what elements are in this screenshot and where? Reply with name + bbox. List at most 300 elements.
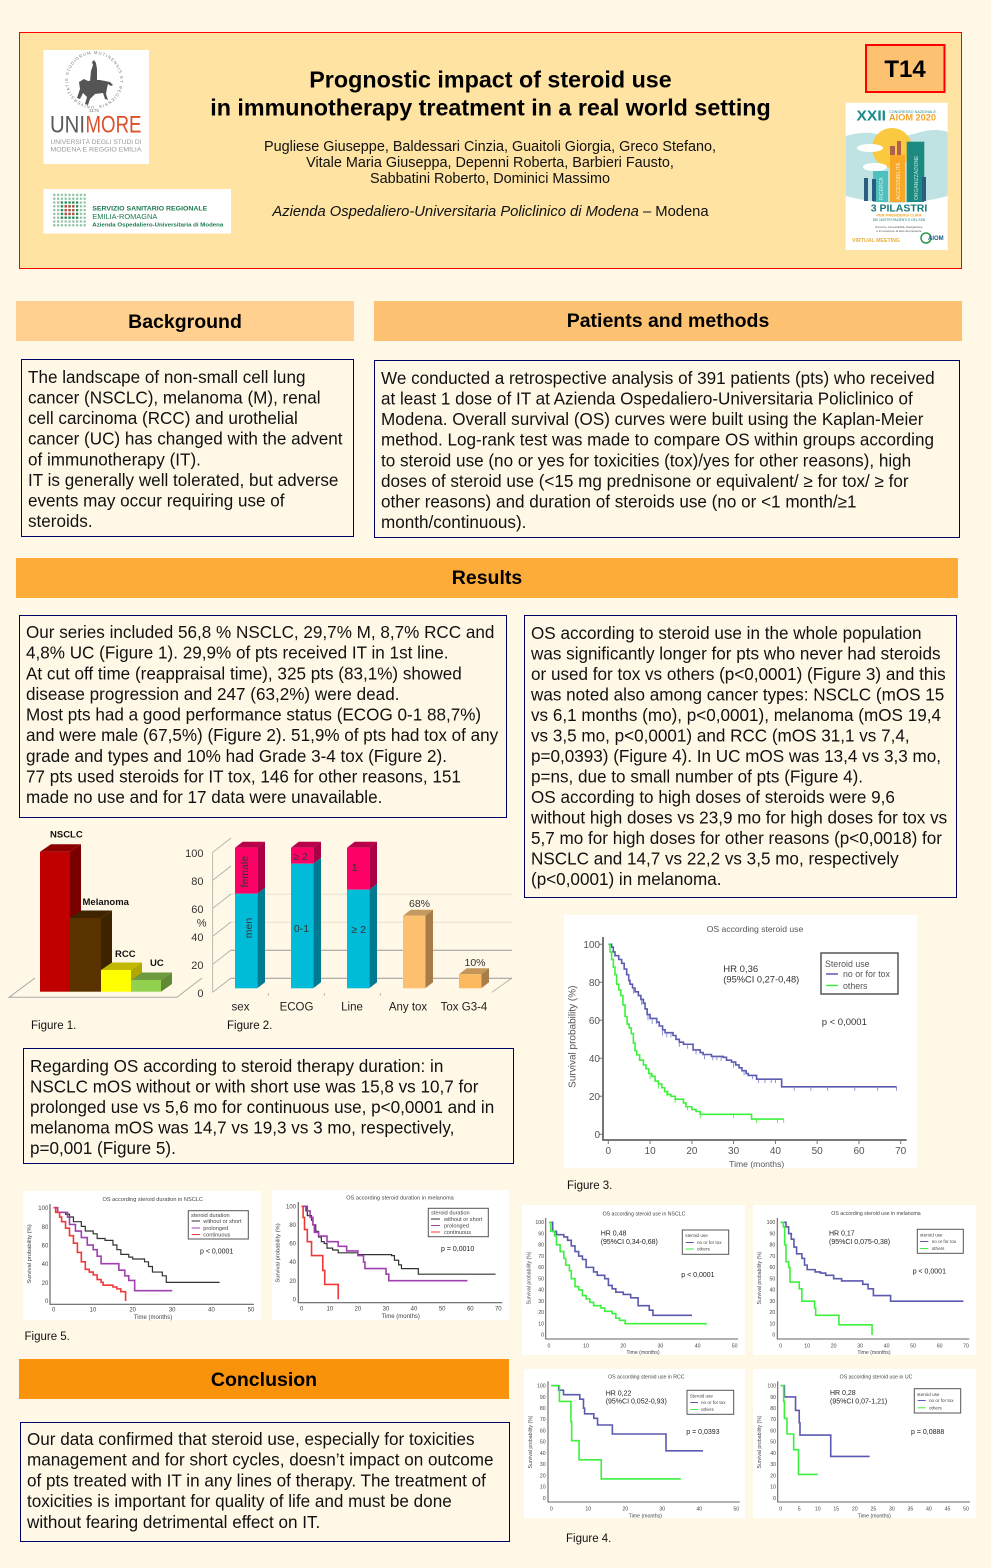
figure 4d: OS by steroid use in UC: 20: [852, 1506, 858, 1512]
figure 5a: OS by steroid duration in NSCLC: 20: [42, 1281, 49, 1287]
text block: OS according to steroid use: p=0,0393) (Figure 4). In UC mOS was 13,4 vs 3,3 mo,: [531, 747, 941, 766]
bar: RCC: [101, 962, 142, 992]
congress poster image: AIOM 2020: [889, 113, 936, 123]
figure 4b: OS by steroid use in melanoma: 0: [772, 1333, 775, 1339]
legend: Steroid use: [690, 1393, 713, 1398]
text block: OS according to steroid use: without high doses vs 23,9 mo for high doses for tox vs: [530, 808, 947, 828]
header panel: [19, 32, 962, 269]
figure 4a: OS by steroid use in NSCLC: 100: [535, 1220, 544, 1226]
figure 4b: OS by steroid use in melanoma: 90: [770, 1231, 775, 1237]
text block: steroid therapy duration: Regarding OS according to steroid therapy duration: in: [30, 1057, 443, 1076]
text block: OS according to steroid use: OS according to high doses of steroids were 9,6: [531, 788, 895, 807]
figure 4b: OS by steroid use in melanoma: p < 0,0001: [913, 1268, 946, 1276]
bar labels: NSCLC: [50, 830, 83, 840]
text block: patients and methods: month/continuous).: [381, 513, 526, 532]
figure 5b: OS by steroid duration in melanoma: Time (months): [381, 1314, 420, 1320]
figure 4a: OS by steroid use in NSCLC: 40: [695, 1343, 701, 1349]
axis labels: 0: [197, 988, 204, 1000]
authors: Sabbatini Roberto, Dominici Massimo: [370, 171, 610, 187]
text block: results series: 4,8% UC (Figure 1). 29,9% of pts received IT in 1st line.: [26, 644, 448, 663]
text block: OS according to steroid use: was noted also among cancer types: NSCLC (mOS 15: [530, 686, 944, 704]
figure 4c: OS by steroid use in RCC: [524, 1369, 745, 1519]
bar: ECOG: ≥ 2: [293, 851, 308, 863]
authors: Pugliese Giuseppe, Baldessari Cinzia, Guaitoli Giorgia, Greco Stefano,: [264, 139, 716, 155]
figure 5b: OS by steroid duration in melanoma: 60: [467, 1306, 474, 1312]
legend: without or short: [443, 1217, 483, 1223]
figure 3: Kaplan-Meier, OS according steroid use: 20: [686, 1146, 698, 1157]
figure 4a: OS by steroid use in NSCLC: 30: [658, 1343, 663, 1349]
figure 4b: OS by steroid use in melanoma: HR 0,17: [829, 1230, 855, 1238]
figure 4a: OS by steroid use in NSCLC: 70: [538, 1254, 544, 1260]
figure 4b: OS by steroid use in melanoma: 10: [770, 1321, 775, 1327]
bar labels: Melanoma: [82, 897, 130, 908]
bar: Melanoma: [70, 910, 112, 992]
figure 5b: OS by steroid duration in melanoma: 100: [286, 1204, 297, 1210]
logo: UNIMORE: UNI: [50, 112, 85, 139]
figure 4a: OS by steroid use in NSCLC: Time (months): [626, 1350, 660, 1356]
legend: steroid use: [917, 1392, 940, 1397]
figure 3: Kaplan-Meier, OS according steroid use: HR 0,36: [723, 964, 758, 975]
figure 3: Kaplan-Meier, OS according steroid use: 40: [770, 1146, 781, 1157]
logo: Servizio Sanitario Regionale: [44, 189, 231, 234]
abstract code badge: [866, 45, 944, 92]
affiliation: Azienda Ospedaliero-Universitaria Policlinico di Modena – Modena: [271, 204, 709, 220]
congress poster image: ACCESSIBILITÀ: [895, 162, 902, 200]
text block: conclusion: management and for short cycles, doesn’t impact on outcome: [27, 1451, 494, 1470]
figure 4c: OS by steroid use in RCC: 10: [540, 1484, 546, 1490]
figure 4a: OS by steroid use in NSCLC: 20: [538, 1310, 544, 1316]
congress poster image: DEI NOSTRI PAZIENTI E DEL SSN: [873, 218, 926, 222]
bar: ECOG: 0-1: [294, 923, 309, 935]
figure 4a: OS by steroid use in NSCLC: 10: [583, 1343, 589, 1349]
figure 5a: OS by steroid duration in NSCLC: 0: [45, 1299, 49, 1305]
figure 4b: OS by steroid use in melanoma: [753, 1205, 976, 1356]
text block: conclusion: of pts treated with IT in any lines of therapy. The treatment of: [27, 1472, 486, 1490]
text block: conclusion: [20, 1422, 510, 1542]
legend: steroid use: [685, 1233, 708, 1238]
bar labels: [50, 830, 164, 969]
figure 5a: OS by steroid duration in NSCLC: 30: [169, 1308, 176, 1314]
figure 4c: OS by steroid use in RCC: 100: [537, 1384, 546, 1390]
figure 4d: OS by steroid use in UC: (95%CI 0,07-1,21): [830, 1398, 887, 1406]
figure 4b: OS by steroid use in melanoma: 60: [770, 1265, 775, 1271]
text block: results series: [20, 616, 506, 818]
bar: sex: female: [239, 856, 251, 887]
figure 4c: OS by steroid use in RCC: 50: [733, 1506, 739, 1512]
figure 5b: OS by steroid duration in melanoma: 30: [383, 1306, 390, 1312]
figure 3: Kaplan-Meier, OS according steroid use: Survival probability (%): [568, 986, 578, 1088]
axis labels: 20: [191, 960, 204, 972]
figure 5b: OS by steroid duration in melanoma: 80: [289, 1223, 297, 1229]
figure 5b: OS by steroid duration in melanoma: 10: [326, 1306, 334, 1312]
figure 3: Kaplan-Meier, OS according steroid use: OS according steroid use: [707, 924, 803, 934]
heading: Conclusion: [19, 1359, 509, 1399]
figure 5b: OS by steroid duration in melanoma: 50: [439, 1306, 446, 1312]
legend: [917, 1229, 963, 1253]
text block: results series: Most pts had a good performance status (ECOG 0-1 88,7%): [26, 706, 481, 724]
figure 4d: OS by steroid use in UC: 80: [770, 1406, 776, 1412]
figure 4c: OS by steroid use in RCC: 60: [540, 1428, 546, 1434]
legend: prolonged: [203, 1226, 228, 1232]
legend: [682, 1230, 729, 1254]
congress poster image: e innovazione al letto del paziente: [876, 229, 922, 233]
title: Prognostic impact of steroid use: [309, 66, 672, 92]
logo: UNIMORE: UNIVERSITATIS STUDIORUM MUTINENSIS ET REGIENSIS: [65, 51, 123, 109]
figure 4a: OS by steroid use in NSCLC: 90: [538, 1231, 544, 1237]
figure 4c: OS by steroid use in RCC: 80: [540, 1406, 546, 1412]
text block: OS according to steroid use: or used for tox vs others (p<0,0001) (Figure 3) and this: [531, 665, 946, 684]
text block: steroid therapy duration: NSCLC mOS without or with short use was 15,8 vs 10,7 for: [30, 1078, 479, 1096]
text block: results series: disease progression and 247 (63,2%) were dead.: [26, 685, 399, 704]
logo: UNIMORE: 1175: [89, 108, 99, 113]
axis labels: %: [197, 918, 207, 930]
text block: conclusion: Our data confirmed that steroid use, especially for toxicities: [27, 1430, 474, 1449]
figure 5b: OS by steroid duration in melanoma: 0: [300, 1306, 304, 1312]
congress poster image: 3 PILASTRI: [871, 203, 927, 215]
legend: others: [929, 1405, 942, 1410]
figure 4d: OS by steroid use in UC: 40: [926, 1506, 932, 1512]
figure 4b: OS by steroid use in melanoma: 40: [770, 1288, 775, 1294]
survival curves: [608, 944, 897, 1123]
figure 3: Kaplan-Meier, OS according steroid use: 20: [589, 1092, 600, 1103]
text block: steroid therapy duration: [24, 1048, 514, 1164]
figure 4a: OS by steroid use in NSCLC: 40: [538, 1288, 544, 1294]
text block: patients and methods: method. Log-rank test was made to compare OS within groups according: [381, 431, 934, 450]
figure 3: Kaplan-Meier, OS according steroid use: 100: [583, 940, 600, 951]
figure 4a: OS by steroid use in NSCLC: 80: [538, 1243, 544, 1249]
figure 4d: OS by steroid use in UC: 50: [770, 1440, 776, 1446]
figure 4a: OS by steroid use in NSCLC: 60: [538, 1265, 544, 1271]
axis labels: [185, 848, 207, 1000]
text block: patients and methods: Modena. Overall survival (OS) curves were built using the Kaplan-Meier: [381, 410, 924, 429]
category labels: Tox G3-4: [441, 1002, 488, 1014]
figure 4c: OS by steroid use in RCC: 70: [540, 1417, 546, 1423]
figure 4d: OS by steroid use in UC: 30: [770, 1462, 776, 1468]
legend: continuous: [444, 1230, 471, 1236]
legend: steroid duration: [431, 1210, 470, 1216]
bar: NSCLC: [40, 844, 81, 992]
figure 4b: OS by steroid use in melanoma: 50: [910, 1343, 916, 1349]
figure 4d: OS by steroid use in UC: 5: [798, 1506, 801, 1512]
figure 4a: OS by steroid use in NSCLC: 0: [541, 1333, 544, 1339]
figure 5a: OS by steroid duration in NSCLC: 20: [129, 1308, 137, 1314]
category labels: Line: [341, 1002, 363, 1014]
bar: Line: [347, 842, 377, 988]
figure 4a: OS by steroid use in NSCLC: 20: [620, 1343, 626, 1349]
text block: background: cancer (UC) has changed with the advent: [28, 430, 343, 449]
figure 3: Kaplan-Meier, OS according steroid use: 70: [895, 1146, 907, 1157]
logo: Servizio Sanitario Regionale: Azienda Ospedaliero-Universitaria di Modena: [92, 223, 223, 229]
heading: Background: [16, 301, 354, 341]
caption: Figure 2: Figure 2.: [227, 1020, 272, 1032]
figure 5b: OS by steroid duration in melanoma: 20: [355, 1306, 362, 1312]
figure 5b: OS by steroid duration in melanoma: 40: [411, 1306, 418, 1312]
text block: patients and methods: at least 1 dose of IT at Azienda Ospedaliero-Universitaria Policlinico of: [381, 390, 913, 409]
figure 4b: OS by steroid use in melanoma: 20: [770, 1310, 775, 1316]
figure 4c: OS by steroid use in RCC: p = 0,0393: [686, 1429, 720, 1436]
bar: Any tox: 68%: [409, 898, 430, 910]
text block: results series: and were male (67,5%) (Figure 2). 51,9% of pts had tox of any: [26, 726, 499, 745]
figure 4b: OS by steroid use in melanoma: 70: [770, 1254, 775, 1260]
title: [210, 66, 771, 120]
figure 2: 3D stacked bar chart: [185, 838, 512, 1014]
figure 3: Kaplan-Meier, OS according steroid use: 60: [853, 1146, 865, 1157]
heading: Conclusion: Conclusion: [211, 1369, 317, 1391]
figure 4b: OS by steroid use in melanoma: 100: [767, 1220, 775, 1226]
figure 3: Kaplan-Meier, OS according steroid use: 50: [812, 1146, 823, 1157]
figure 4a: OS by steroid use in NSCLC: (95%CI 0,34-0,68): [601, 1239, 658, 1246]
congress poster image: [846, 103, 948, 250]
legend: no or for tox: [701, 1400, 726, 1405]
figure 5b: OS by steroid duration in melanoma: 40: [289, 1260, 297, 1266]
figure 4c: OS by steroid use in RCC: OS according steroid use in RCC: [608, 1374, 685, 1380]
text block: patients and methods: to steroid use (no or yes for toxicities (tox)/yes for other reasons), high: [381, 451, 911, 470]
figure 4d: OS by steroid use in UC: 90: [770, 1395, 776, 1401]
authors: [264, 139, 716, 187]
figure 4d: OS by steroid use in UC: Time (months): [858, 1513, 891, 1519]
text block: steroid therapy duration: melanoma mOS was 14,7 vs 19,3 vs 3 mo, respectively,: [30, 1118, 454, 1138]
caption: Figure 4: Figure 4.: [566, 1533, 611, 1545]
legend: [914, 1389, 961, 1413]
caption: Figure 1: Figure 1.: [31, 1020, 76, 1032]
figure 4c: OS by steroid use in RCC: 40: [540, 1451, 546, 1457]
figure 5a: OS by steroid duration in NSCLC: Survival probability (%): [27, 1224, 33, 1284]
text block: background: steroids.: [28, 512, 93, 531]
congress poster image: AIOM: [928, 236, 944, 242]
figure 4d: OS by steroid use in UC: HR 0,28: [830, 1390, 856, 1397]
text block: steroid therapy duration: p=0,001 (Figure 5).: [30, 1139, 176, 1158]
bar: Any tox: [403, 898, 433, 988]
legend: prolonged: [444, 1224, 469, 1230]
text block: OS according to steroid use: OS according to steroid use in the whole population: [531, 624, 922, 643]
axis labels: 100: [185, 848, 204, 860]
figure 5b: OS by steroid duration in melanoma: 0: [293, 1298, 297, 1304]
text block: background: cell carcinoma (RCC) and urothelial: [28, 409, 298, 428]
heading: Results: Results: [452, 567, 522, 589]
text block: OS according to steroid use: p=ns, due to small number of pts (Figure 4).: [531, 768, 863, 786]
congress poster image: ORGANIZZAZIONE: [914, 155, 920, 200]
figure 3: Kaplan-Meier, OS according steroid use: 80: [589, 978, 600, 989]
legend: others: [843, 981, 868, 991]
legend: no or for tox: [929, 1398, 954, 1403]
figure 4d: OS by steroid use in UC: OS according steroid use in UC: [840, 1374, 913, 1380]
figure 4d: OS by steroid use in UC: [753, 1369, 976, 1519]
text block: results series: Our series included 56,8 % NSCLC, 29,7% M, 8,7% RCC and: [26, 623, 494, 642]
figure 3: Kaplan-Meier, OS according steroid use: Time (months): [729, 1159, 784, 1169]
bar: sex: men: [243, 918, 255, 938]
text block: conclusion: toxicities is important for quality of life and must be done: [27, 1492, 452, 1511]
figure 5a: OS by steroid duration in NSCLC: p < 0,0001: [200, 1248, 233, 1256]
figure 4c: OS by steroid use in RCC: 10: [585, 1506, 591, 1512]
figure 4a: OS by steroid use in NSCLC: 30: [538, 1299, 544, 1305]
text block: OS according to steroid use: (p<0,0001) in melanoma.: [531, 870, 722, 889]
authors: Vitale Maria Giuseppa, Depenni Roberta, Barbieri Fausto,: [306, 155, 674, 171]
figure 4c: OS by steroid use in RCC: (95%CI 0,052-0,93): [606, 1398, 667, 1406]
figure 5a: OS by steroid duration in NSCLC: 60: [42, 1244, 49, 1250]
figure 4a: OS by steroid use in NSCLC: 50: [732, 1343, 738, 1349]
figure 4b: OS by steroid use in melanoma: (95%CI 0,075-0,38): [829, 1239, 890, 1246]
figure 5b: OS by steroid duration in melanoma: p = 0,0010: [441, 1246, 474, 1253]
text block: results series: made no use and for 17 data were unavailable.: [26, 788, 382, 807]
figure 5a: OS by steroid duration in NSCLC: 40: [208, 1308, 215, 1314]
figure 4d: OS by steroid use in UC: 10: [770, 1484, 776, 1490]
figure 4b: OS by steroid use in melanoma: 0: [779, 1343, 782, 1349]
figure 4b: OS by steroid use in melanoma: 30: [857, 1343, 863, 1349]
figure 3: Kaplan-Meier, OS according steroid use: p < 0,0001: [822, 1017, 867, 1028]
text block: results series: 77 pts used steroids for IT tox, 146 for other reasons, 151: [26, 767, 461, 786]
text block: steroid therapy duration: prolonged use vs 5,6 mo for continuous use, p<0,0001 and in: [30, 1098, 494, 1117]
figure 4a: OS by steroid use in NSCLC: [522, 1205, 745, 1356]
category labels: sex: [232, 1002, 250, 1014]
figure 4c: OS by steroid use in RCC: 90: [540, 1395, 546, 1401]
heading: Patients and methods: [374, 301, 962, 341]
legend: no or for tox: [697, 1240, 722, 1245]
text block: patients and methods: doses of steroid use (<15 mg prednisone or equivalent/ ≥ for tox/ ≥ for: [381, 472, 909, 491]
legend: Steroid use: [825, 959, 870, 969]
figure 5b: OS by steroid duration in melanoma: 70: [495, 1306, 502, 1312]
figure 4c: OS by steroid use in RCC: HR 0,22: [606, 1390, 631, 1398]
figure 4b: OS by steroid use in melanoma: Survival probability (%): [757, 1251, 763, 1305]
heading: Results: [16, 558, 958, 598]
logo: Servizio Sanitario Regionale: EMILIA-ROMAGNA: [92, 214, 158, 221]
legend: others: [697, 1246, 710, 1252]
figure 5b: OS by steroid duration in melanoma: Survival probability (%): [276, 1223, 282, 1283]
logo: UNIMORE: UNIVERSITÀ DEGLI STUDI DI: [50, 137, 142, 146]
figure 4d: OS by steroid use in UC: Survival probability (%): [757, 1415, 763, 1469]
figure 4d: OS by steroid use in UC: 0: [779, 1506, 782, 1512]
figure 4b: OS by steroid use in melanoma: OS according steroid use in melanoma: [831, 1211, 921, 1217]
bar: sex: [235, 842, 265, 988]
legend: [428, 1208, 488, 1237]
text block: patients and methods: We conducted a retrospective analysis of 391 patients (pts) who received: [381, 369, 935, 388]
congress poster image: VIRTUAL MEETING: [852, 238, 900, 244]
figure 3: Kaplan-Meier, OS according steroid use: (95%CI 0,27-0,48): [723, 974, 799, 984]
figure 4c: OS by steroid use in RCC: 40: [696, 1506, 702, 1512]
figure 5a: OS by steroid duration in NSCLC: 0: [52, 1308, 56, 1314]
legend: others: [932, 1246, 945, 1251]
figure 4b: OS by steroid use in melanoma: 40: [884, 1343, 890, 1349]
congress poster image: XXII: [856, 108, 886, 125]
abstract code badge: T14: [884, 56, 926, 83]
figure 4a: OS by steroid use in NSCLC: 50: [538, 1276, 544, 1282]
text block: background: events may occur requiring use of: [28, 491, 285, 510]
figure 4b: OS by steroid use in melanoma: 50: [770, 1276, 775, 1282]
text block: OS according to steroid use: [524, 616, 956, 898]
figure 4d: OS by steroid use in UC: 50: [963, 1506, 969, 1512]
category labels: [232, 1002, 488, 1014]
congress poster image: RICERCA: [879, 177, 885, 200]
figure 4b: OS by steroid use in melanoma: Time (months): [857, 1350, 891, 1356]
text block: patients and methods: other reasons) and duration of steroids use (no or <1 month/≥1: [381, 492, 856, 511]
figure 5b: OS by steroid duration in melanoma: OS according steroid duration in melanoma: [346, 1196, 455, 1202]
figure 4b: OS by steroid use in melanoma: 10: [804, 1343, 810, 1349]
figure 4d: OS by steroid use in UC: 10: [815, 1506, 821, 1512]
figure 4a: OS by steroid use in NSCLC: HR 0,48: [601, 1230, 626, 1238]
legend: [188, 1211, 248, 1239]
figure 4c: OS by steroid use in RCC: 50: [540, 1440, 546, 1446]
legend: no or for tox: [932, 1239, 957, 1244]
logo: UNIMORE: MORE: [86, 112, 142, 139]
bar labels: UC: [150, 958, 164, 969]
figure 5a: OS by steroid duration in NSCLC: 10: [90, 1308, 97, 1314]
heading: Patients and methods: Patients and methods: [567, 310, 769, 332]
figure 4b: OS by steroid use in melanoma: 30: [770, 1299, 775, 1305]
text block: OS according to steroid use: 5,7 mo for high doses for other reasons (p<0,0018) for: [531, 829, 942, 848]
bar: Tox G3-4: [459, 957, 489, 988]
text block: results series: grade and types and 10% had Grade 3-4 tox (Figure 2).: [26, 747, 447, 766]
bar: Tox G3-4: 10%: [464, 957, 486, 969]
figure 4c: OS by steroid use in RCC: 0: [543, 1496, 546, 1502]
text block: patients and methods: [374, 360, 960, 538]
figure 5a: OS by steroid duration in NSCLC: 40: [42, 1262, 49, 1268]
figure 4d: OS by steroid use in UC: 60: [770, 1428, 776, 1434]
text block: OS according to steroid use: vs 6,1 months (mo), p<0,0001), melanoma (mOS 19,4: [531, 706, 941, 725]
figure 5b: OS by steroid duration in melanoma: 20: [289, 1279, 297, 1285]
heading: Background: Background: [128, 311, 242, 333]
legend: steroid use: [920, 1232, 943, 1237]
logo: UNIMORE: [44, 50, 149, 164]
bar: UC: [131, 972, 172, 992]
figure 5a: OS by steroid duration in NSCLC: 100: [38, 1206, 49, 1212]
logo: Servizio Sanitario Regionale: SERVIZIO SANITARIO REGIONALE: [92, 205, 208, 212]
congress poster image: CONGRESSO NAZIONALE: [889, 110, 937, 114]
figure 3: Kaplan-Meier, OS according steroid use: 0: [594, 1130, 600, 1141]
figure 5a: OS by steroid duration in NSCLC: [23, 1191, 261, 1321]
legend: no or for tox: [843, 969, 891, 979]
figure 4c: OS by steroid use in RCC: 30: [540, 1462, 546, 1468]
congress poster image: Percorsi, Accessibilità, Navigazione: [875, 225, 923, 229]
figure 4d: OS by steroid use in UC: 0: [773, 1496, 776, 1502]
category labels: ECOG: [280, 1002, 313, 1014]
figure 4c: OS by steroid use in RCC: 30: [659, 1506, 665, 1512]
axis labels: 40: [191, 932, 204, 944]
legend: without or short: [202, 1219, 242, 1225]
legend: others: [701, 1407, 714, 1412]
figure 5a: OS by steroid duration in NSCLC: Time (months): [134, 1315, 172, 1321]
figure 4d: OS by steroid use in UC: 40: [770, 1451, 776, 1457]
figure 4d: OS by steroid use in UC: 20: [770, 1473, 776, 1479]
figure 4a: OS by steroid use in NSCLC: 0: [548, 1343, 551, 1349]
figure 3: Kaplan-Meier, OS according steroid use: 60: [589, 1016, 600, 1027]
bar: ECOG: [291, 842, 321, 988]
figure 5a: OS by steroid duration in NSCLC: 50: [248, 1308, 255, 1314]
text block: background: IT is generally well tolerated, but adverse: [28, 471, 338, 490]
figure 4a: OS by steroid use in NSCLC: Survival probability (%): [526, 1251, 532, 1305]
figure 3: Kaplan-Meier, OS according steroid use: 0: [606, 1146, 612, 1157]
figure 4d: OS by steroid use in UC: 25: [871, 1506, 876, 1512]
text block: background: of immunotherapy (IT).: [28, 450, 201, 469]
figure 4a: OS by steroid use in NSCLC: OS according steroid use in NSCLC: [603, 1212, 686, 1218]
figure 4c: OS by steroid use in RCC: 0: [550, 1506, 553, 1512]
title: in immunotherapy treatment in a real world setting: [210, 94, 771, 120]
axis labels: 60: [191, 904, 204, 916]
figure 4d: OS by steroid use in UC: 45: [945, 1506, 950, 1512]
text block: background: [22, 360, 354, 536]
figure 1: 3D bar chart of cancer types: [9, 830, 202, 997]
legend: steroid duration: [191, 1213, 230, 1219]
figure 4c: OS by steroid use in RCC: Time (months): [629, 1513, 662, 1519]
text block: OS according to steroid use: was significantly longer for pts who never had steroids: [530, 644, 941, 664]
logo: UNIMORE: MODENA E REGGIO EMILIA: [50, 146, 142, 153]
figure 4b: OS by steroid use in melanoma: 60: [937, 1343, 943, 1349]
figure 4a: OS by steroid use in NSCLC: 10: [538, 1321, 544, 1327]
figure 4d: OS by steroid use in UC: p = 0,0888: [911, 1429, 944, 1436]
figure 3: Kaplan-Meier, OS according steroid use: 10: [645, 1146, 656, 1157]
figure 4d: OS by steroid use in UC: 30: [889, 1506, 895, 1512]
bar labels: RCC: [115, 949, 136, 960]
category labels: Any tox: [389, 1002, 427, 1014]
text block: background: cancer (NSCLC), melanoma (M), renal: [28, 389, 321, 408]
